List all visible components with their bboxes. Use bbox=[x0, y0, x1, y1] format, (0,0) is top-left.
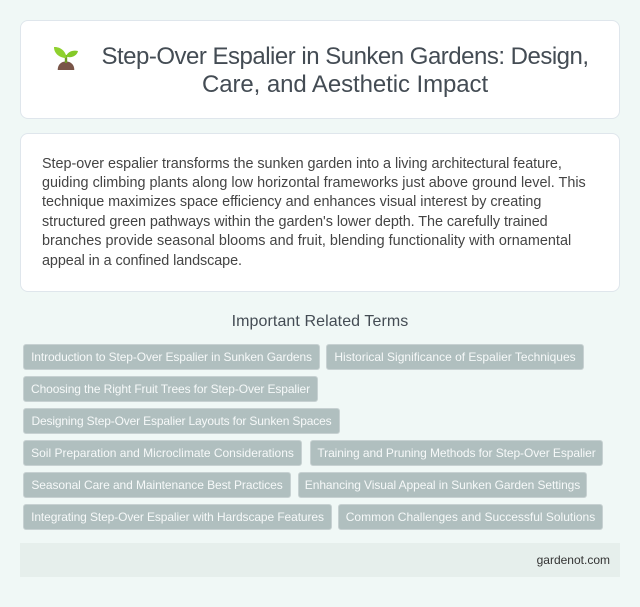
tag bbox=[23, 408, 340, 434]
tag bbox=[23, 376, 318, 402]
tag bbox=[23, 344, 320, 370]
description text bbox=[42, 156, 586, 269]
tag list bbox=[23, 344, 603, 530]
tag: Designing Step-Over Espalier Layouts for Sunken Spaces bbox=[31, 414, 332, 428]
description text: technique maximizes space efficiency and enhances visual interest by creating bbox=[42, 194, 541, 210]
tag bbox=[326, 344, 584, 370]
heading: Step-Over Espalier in Sunken Gardens: Design, bbox=[101, 43, 589, 70]
heading: related terms: Important Related Terms bbox=[232, 313, 408, 330]
panel: description bbox=[20, 133, 620, 292]
description text: appeal in a confined landscape. bbox=[42, 253, 242, 269]
tag bbox=[23, 440, 302, 466]
description text: guiding climbing plants along low horizontal frameworks just above ground level. This bbox=[42, 175, 586, 191]
heading: Care, and Aesthetic Impact bbox=[202, 71, 488, 98]
tag bbox=[298, 472, 587, 498]
tag: Seasonal Care and Maintenance Best Practices bbox=[31, 478, 283, 492]
heading bbox=[101, 43, 589, 98]
footer text: gardenot.com bbox=[537, 553, 610, 567]
footer bbox=[20, 543, 620, 577]
tag: Common Challenges and Successful Solutions bbox=[346, 510, 595, 524]
icon: seedling bbox=[54, 47, 78, 70]
description text: Step-over espalier transforms the sunken garden into a living architectural feature, bbox=[42, 156, 562, 172]
tag: Training and Pruning Methods for Step-Over Espalier bbox=[317, 446, 596, 460]
tag: Historical Significance of Espalier Techniques bbox=[334, 350, 576, 364]
tag bbox=[338, 504, 603, 530]
tag: Enhancing Visual Appeal in Sunken Garden Settings bbox=[305, 478, 580, 492]
tag: Choosing the Right Fruit Trees for Step-Over Espalier bbox=[31, 382, 310, 396]
tag bbox=[23, 504, 332, 530]
tag bbox=[310, 440, 603, 466]
tag: Integrating Step-Over Espalier with Hardscape Features bbox=[31, 510, 324, 524]
panel: title card bbox=[20, 20, 620, 119]
description text: branches provide seasonal blooms and fruit, blending functionality with ornamental bbox=[42, 233, 571, 249]
tag: Soil Preparation and Microclimate Considerations bbox=[31, 446, 294, 460]
description text: structured green pathways within the garden's lower depth. The carefully trained bbox=[42, 214, 548, 230]
tag bbox=[23, 472, 291, 498]
tag: Introduction to Step-Over Espalier in Sunken Gardens bbox=[31, 350, 312, 364]
